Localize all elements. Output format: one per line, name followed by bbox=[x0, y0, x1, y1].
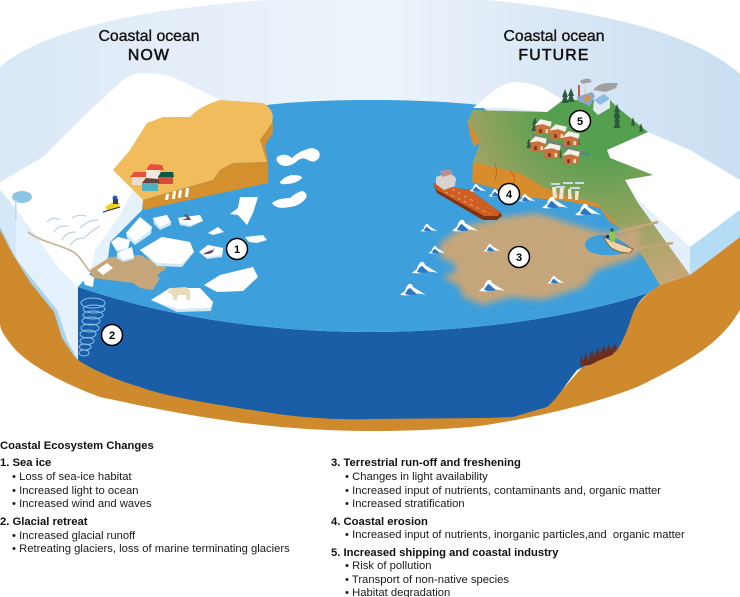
marker 4 bbox=[498, 184, 520, 204]
sea ice list bbox=[0, 457, 152, 510]
marker 1 bbox=[226, 238, 248, 260]
ice block side face bbox=[690, 210, 740, 275]
terrestrial run-off list: 3. Terrestrial run-off and freshening bbox=[331, 457, 521, 469]
sea ice floes bbox=[82, 148, 320, 312]
sea ice list: • Increased wind and waves bbox=[12, 498, 152, 510]
icon: cargo ship bbox=[433, 169, 502, 220]
icon: village bbox=[130, 164, 174, 191]
eroded cliff bbox=[472, 162, 620, 228]
green to sediment land bbox=[467, 100, 690, 285]
glacial retreat list: • Retreating glaciers, loss of marine terminating glaciers bbox=[12, 543, 290, 555]
sea ice list: 1. Sea ice bbox=[0, 457, 51, 469]
glacier face bbox=[0, 190, 110, 360]
terrestrial run-off list: • Increased input of nutrients, contaminants and, organic matter bbox=[345, 485, 661, 497]
marker 5: 5 bbox=[577, 116, 583, 128]
marker 3 bbox=[508, 246, 530, 268]
title: coastal ocean future: Coastal ocean bbox=[504, 28, 604, 45]
title: coastal ocean now: NOW bbox=[128, 47, 170, 64]
heading: coastal ecosystem changes: Coastal Ecosystem Changes bbox=[0, 440, 154, 452]
text block: left legend bbox=[0, 440, 290, 555]
panel: coastal ocean now bbox=[0, 73, 320, 360]
icon: snowmobile bbox=[103, 196, 120, 212]
icon: small boat bbox=[603, 228, 633, 253]
marker 1: 1 bbox=[234, 244, 240, 256]
deep ocean front face bbox=[78, 287, 648, 419]
marker 2 bbox=[102, 324, 122, 346]
coastal erosion list: • Increased input of nutrients, inorganic particles,and organic matter bbox=[345, 529, 685, 541]
glacier left band bbox=[0, 186, 16, 258]
land tan bbox=[113, 100, 273, 200]
shipping and industry list: • Transport of non-native species bbox=[345, 574, 509, 586]
marker 5 bbox=[570, 110, 590, 132]
sediment plume future bbox=[440, 213, 640, 305]
waves bbox=[400, 184, 601, 295]
panel: coastal ocean future bbox=[400, 79, 740, 366]
marker 4: 4 bbox=[506, 189, 513, 201]
meltwater pond bbox=[12, 191, 32, 220]
cliff bbox=[143, 120, 273, 210]
icon: factory bbox=[577, 79, 618, 115]
ice block front face bbox=[625, 180, 690, 275]
icon: polar bear bbox=[166, 287, 190, 300]
text block: right legend bbox=[331, 457, 685, 597]
terrestrial run-off list: • Increased stratification bbox=[345, 498, 465, 510]
shipping and industry list: 5. Increased shipping and coastal industry bbox=[331, 547, 559, 559]
sea ice list: • Loss of sea-ice habitat bbox=[12, 471, 133, 483]
icon: seal on floe bbox=[182, 214, 191, 220]
boat pool bbox=[585, 235, 633, 255]
coastal erosion list bbox=[331, 516, 685, 541]
glacier edge band bbox=[0, 226, 78, 360]
glacial retreat list: • Increased glacial runoff bbox=[12, 530, 136, 542]
ice melt on cliff bbox=[165, 188, 189, 200]
terrestrial run-off list bbox=[331, 457, 661, 510]
glacier shadow at coast bbox=[90, 190, 143, 273]
icon: seal on ice bbox=[203, 247, 215, 254]
terrestrial run-off list: • Changes in light availability bbox=[345, 471, 488, 483]
shipping and industry list: • Risk of pollution bbox=[345, 560, 431, 572]
title: coastal ocean future: FUTURE bbox=[518, 47, 590, 64]
icon: seabed kelp bbox=[580, 343, 617, 366]
title: coastal ocean now: Coastal ocean bbox=[98, 28, 200, 45]
meltwater pillars and ice bbox=[551, 182, 584, 200]
title: coastal ocean now bbox=[98, 28, 200, 64]
glacial retreat list: 2. Glacial retreat bbox=[0, 516, 88, 528]
upper eroded cliff bbox=[468, 120, 480, 146]
marker 2: 2 bbox=[109, 330, 115, 342]
ground: seabed cross-section bbox=[0, 226, 740, 431]
glacial runoff swirl bbox=[79, 298, 105, 356]
glacier crevasses bbox=[47, 215, 100, 246]
shipping and industry list bbox=[331, 547, 559, 597]
ocean surface bbox=[78, 100, 660, 332]
glacier top bbox=[0, 73, 220, 287]
sky dome background bbox=[0, 0, 740, 240]
snow cap bbox=[473, 82, 563, 112]
cliff cracks bbox=[495, 163, 515, 188]
right ice sheet top bbox=[607, 132, 740, 247]
marker 3: 3 bbox=[516, 252, 522, 264]
meltwater stream bbox=[28, 232, 90, 272]
coastal erosion list: 4. Coastal erosion bbox=[331, 516, 428, 528]
runoff streams bbox=[617, 222, 673, 249]
sea ice list: • Increased light to ocean bbox=[12, 485, 139, 497]
icon: trees bbox=[527, 88, 643, 158]
icon: town houses bbox=[529, 119, 589, 164]
sediment plume now bbox=[90, 255, 167, 290]
title: coastal ocean future bbox=[504, 28, 604, 64]
glacial retreat list bbox=[0, 516, 290, 555]
